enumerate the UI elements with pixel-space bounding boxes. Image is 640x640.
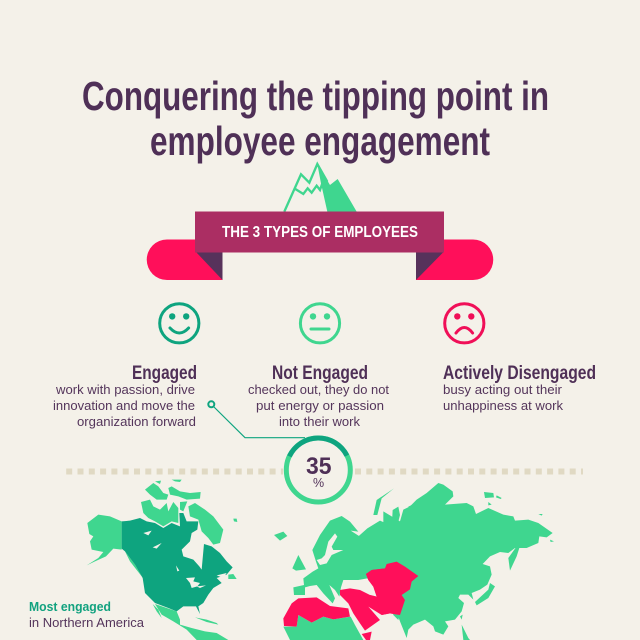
text: most engaged: in Northern America: [29, 615, 145, 630]
icon: neutral face: [300, 304, 340, 343]
great lakes and inland water: [143, 531, 227, 588]
text: engaged: [53, 363, 197, 429]
icon: smiling face: [160, 304, 199, 343]
text: actively disengaged: unhappiness at work: [443, 398, 563, 413]
map: europe, middle east and north africa: [274, 488, 430, 640]
donut: 35 percent: 35: [306, 453, 332, 480]
map: north america: [87, 480, 237, 640]
text: not engaged: Not Engaged: [272, 363, 368, 384]
text: actively disengaged: busy acting out their: [443, 382, 563, 397]
text: not engaged: [248, 363, 389, 429]
red overlay edge repaired over east asia: [366, 562, 418, 615]
text: engaged: innovation and move the: [53, 398, 195, 413]
donut: 35 percent: [286, 438, 350, 502]
arctic islands, Alaska and Mexico: [87, 480, 237, 640]
text: engaged: Engaged: [132, 363, 197, 384]
map: east asia: [383, 483, 554, 640]
Canada and USA: [122, 513, 233, 614]
title: [82, 73, 549, 164]
text: engaged: work with passion, drive: [55, 382, 195, 397]
callout connector: [208, 401, 305, 438]
Europe and western Russia: [293, 500, 430, 620]
text: most engaged: [29, 599, 145, 630]
banner: the 3 types of employees: [147, 212, 493, 280]
small northern islands: [460, 492, 554, 640]
banner: the 3 types of employees: THE 3 TYPES OF EMPLOYEES: [222, 224, 418, 241]
text: actively disengaged: Actively Disengaged: [443, 363, 596, 384]
text: most engaged: Most engaged: [29, 599, 111, 614]
title: employee engagement: [150, 118, 490, 164]
Baltic and Caspian seas: [317, 533, 377, 596]
islands and Africa: [274, 488, 394, 640]
icon: mountain: [284, 164, 357, 212]
least engaged regions: [283, 562, 418, 640]
Japan: [475, 583, 495, 605]
Siberia, China and India: [383, 483, 553, 638]
text: not engaged: into their work: [279, 414, 360, 429]
text: not engaged: checked out, they do not: [248, 382, 389, 397]
text: actively disengaged: [443, 363, 596, 413]
icon: sad face: [445, 304, 484, 343]
donut: 35 percent: %: [313, 476, 324, 490]
text: engaged: organization forward: [77, 414, 196, 429]
Sakhalin and Kamchatka side: [508, 544, 519, 571]
text: not engaged: put energy or passion: [256, 398, 384, 413]
